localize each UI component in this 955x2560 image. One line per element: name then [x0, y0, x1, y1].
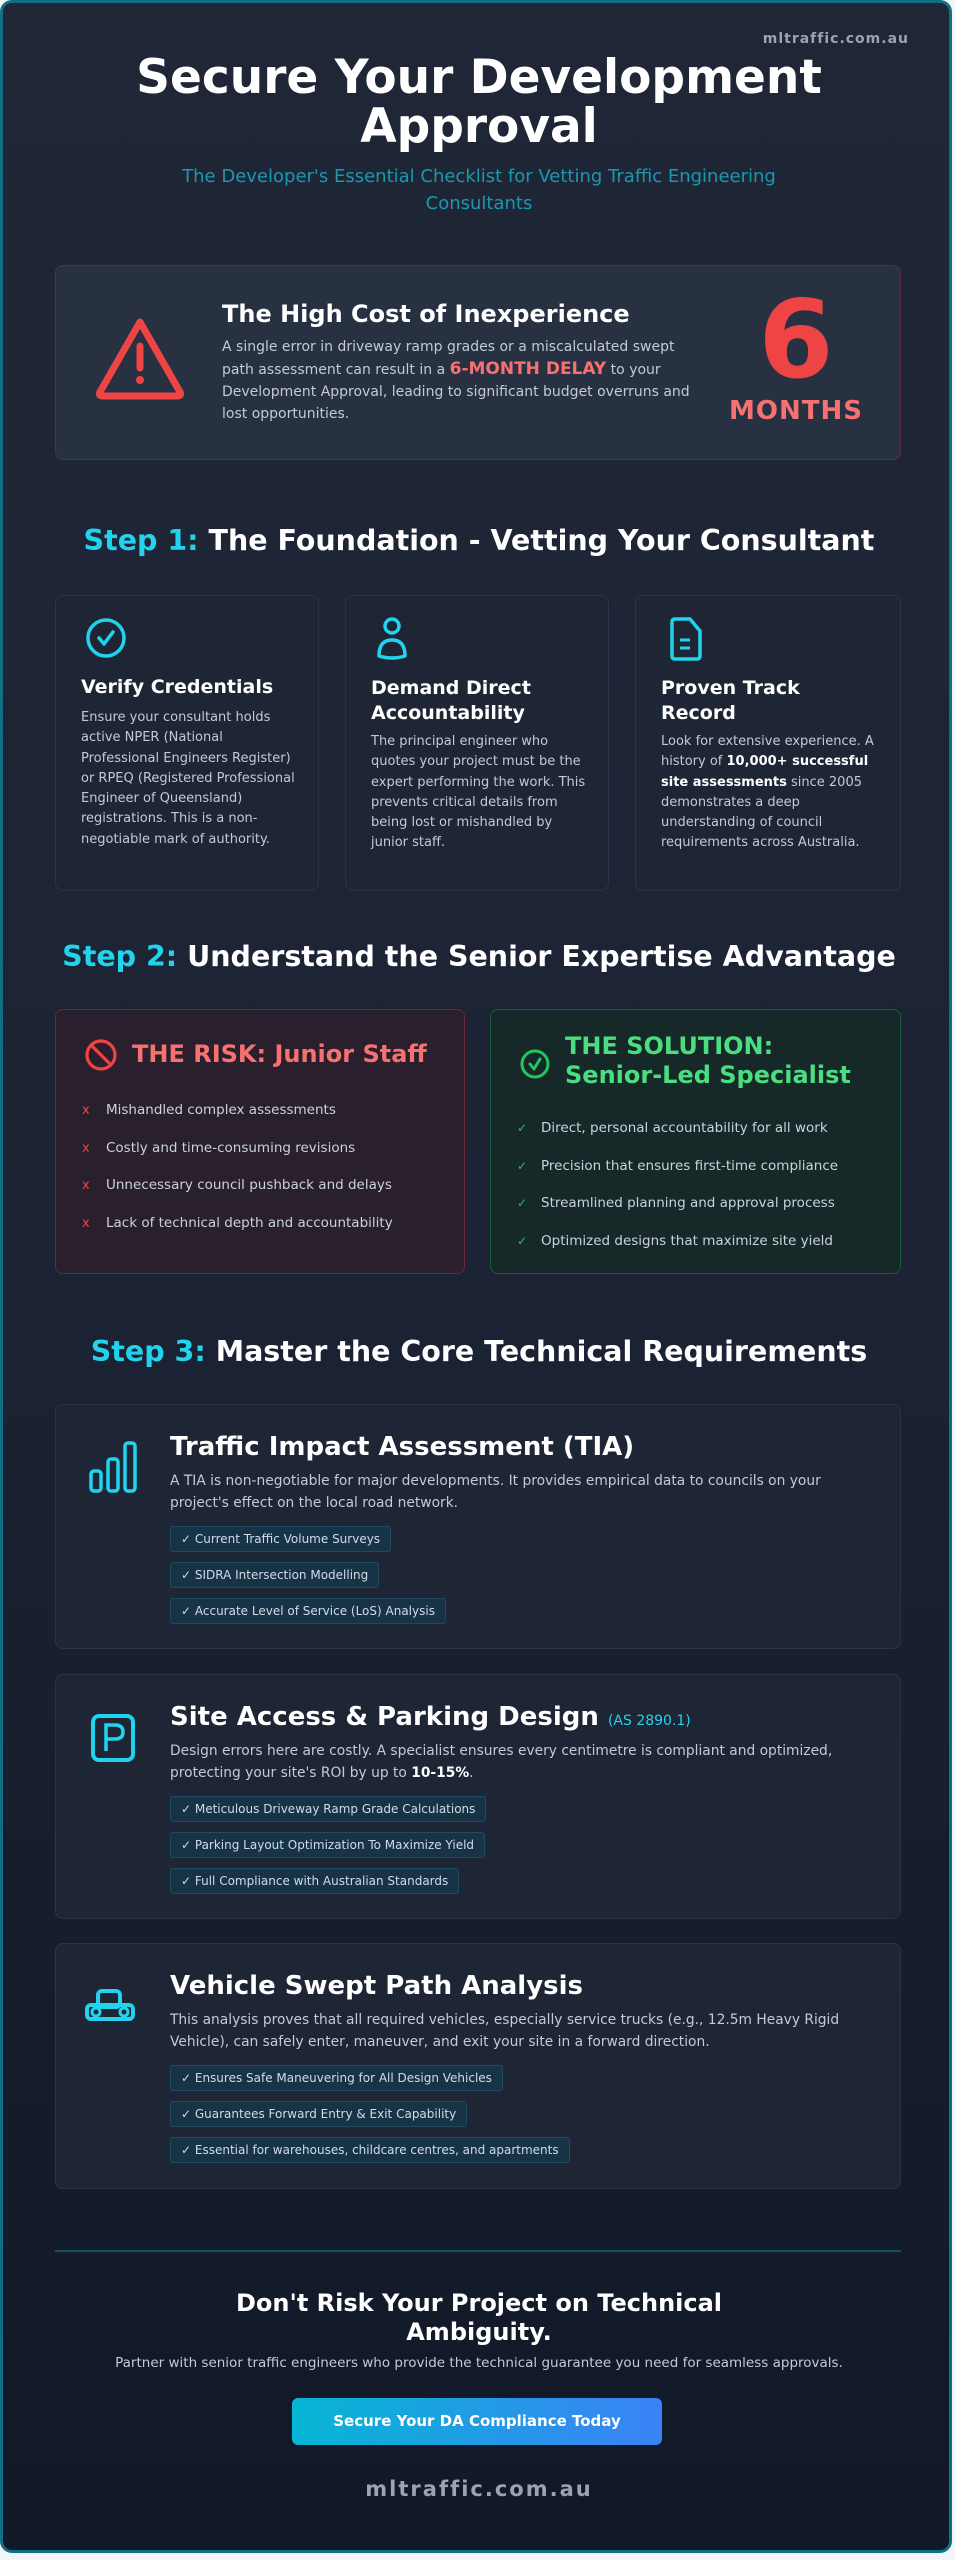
title [136, 50, 822, 154]
text: Ensure your consultant holds active NPER (National Professional Engineers Register) or RPEQ (Registered Professional Engineer of Queensland) registrations. This is a non-negotiable mark of authority. [81, 710, 295, 847]
title: Traffic Impact Assessment (TIA) [170, 1432, 634, 1462]
heading [565, 1032, 851, 1089]
list: Optimized designs that maximize site yield [541, 1232, 833, 1248]
icon: warning [96, 318, 184, 400]
tags: ✓ Guarantees Forward Entry & Exit Capability [181, 2107, 456, 2121]
tags [170, 1796, 486, 1894]
list: x [82, 1178, 90, 1193]
title: Site Access & Parking Design (AS 2890.1) [170, 1702, 691, 1732]
title: Secure Your Development [136, 50, 822, 105]
heading: THE RISK: Junior Staff [132, 1040, 427, 1068]
list: x [82, 1103, 90, 1118]
icon: document [670, 617, 702, 661]
panel: TIA [55, 1404, 901, 1649]
heading: step 2: Step 2: Understand the Senior Expertise Advantage [62, 940, 896, 973]
list: Precision that ensures first-time compliance [541, 1158, 838, 1174]
stat: 6 months [729, 278, 863, 426]
list: ✓ [517, 1196, 527, 1210]
text: This analysis proves that all required vehicles, especially service trucks (e.g., 12.5m Heavy Rigid Vehicle), can safely enter, maneuver, and exit your site in a forward direction. [170, 2012, 839, 2050]
panel: parking [55, 1674, 901, 1919]
tags: ✓ Meticulous Driveway Ramp Grade Calculations [181, 1802, 475, 1816]
panel: swept path [55, 1943, 901, 2189]
CTA button [292, 2398, 662, 2445]
tags: ✓ SIDRA Intersection Modelling [181, 1568, 368, 1582]
footer brand: mltraffic.com.au [365, 2477, 593, 2501]
text: A single error in driveway ramp grades or a miscalculated swept path assessment can result in a 6-MONTH DELAY to your Development Approval, leading to significant budget overruns and lost opportunities. [222, 339, 690, 422]
tags: ✓ Parking Layout Optimization To Maximize Yield [181, 1838, 474, 1852]
title: Demand Direct Accountability [371, 677, 531, 724]
list: x [82, 1140, 90, 1156]
list: Streamlined planning and approval process [541, 1195, 835, 1211]
subtitle: The Developer's Essential Checklist for Vetting Traffic Engineering Consultants [182, 166, 776, 214]
tags: ✓ Current Traffic Volume Surveys [181, 1532, 380, 1546]
text: Design errors here are costly. A specialist ensures every centimetre is compliant and optimized, protecting your site's ROI by up to 10-15%. [170, 1743, 832, 1781]
list: Costly and time-consuming revisions [106, 1140, 355, 1156]
stat: 6 months: MONTHS [729, 396, 863, 426]
CTA heading: Don't Risk Your Project on Technical Ambiguity. [236, 2289, 722, 2346]
text: The principal engineer who quotes your project must be the expert performing the work. This prevents critical details from being lost or mishandled by junior staff. [371, 734, 585, 850]
tags: ✓ Ensures Safe Maneuvering for All Design Vehicles [181, 2071, 492, 2085]
icon: bar chart [89, 1441, 137, 1493]
stat: 6 months: 6 [758, 278, 834, 403]
list: Mishandled complex assessments [106, 1102, 336, 1118]
CTA text: Partner with senior traffic engineers who provide the technical guarantee you need for seamless approvals. [115, 2355, 843, 2371]
heading: step 1: Step 1: The Foundation - Vetting Your Consultant [84, 524, 874, 557]
title: Approval [360, 99, 598, 154]
tags: ✓ Full Compliance with Australian Standards [181, 1874, 448, 1888]
title: Vehicle Swept Path Analysis [170, 1971, 583, 2001]
heading: step 3: Step 3: Master the Core Technical Requirements [91, 1335, 867, 1368]
panel: risk [55, 1009, 465, 1274]
tags [170, 1526, 446, 1624]
list [82, 1102, 393, 1230]
list: ✓ [517, 1158, 527, 1172]
card: track record [635, 595, 901, 891]
card: verify credentials [55, 595, 319, 891]
heading: Senior-Led Specialist [565, 1061, 851, 1089]
list: Direct, personal accountability for all work [541, 1120, 828, 1136]
tags: ✓ Essential for warehouses, childcare centres, and apartments [181, 2143, 559, 2157]
list: ✓ [517, 1234, 527, 1248]
tags [170, 2065, 570, 2163]
icon: person [377, 617, 407, 660]
icon: parking P [91, 1714, 135, 1762]
icon: vehicle [85, 1989, 135, 2021]
brand top: mltraffic.com.au [763, 31, 909, 47]
icon: no sign [85, 1039, 117, 1071]
title: Verify Credentials [81, 676, 273, 698]
title: Proven Track Record [661, 677, 800, 724]
icon: check circle [86, 618, 126, 658]
tags: ✓ Accurate Level of Service (LoS) Analysis [181, 1604, 435, 1618]
list: Unnecessary council pushback and delays [106, 1177, 392, 1193]
heading: The High Cost of Inexperience [222, 300, 630, 328]
list [517, 1120, 838, 1248]
panel: solution [490, 1009, 901, 1274]
list: x [82, 1216, 90, 1230]
card: direct accountability [345, 595, 609, 891]
icon: check circle [520, 1050, 550, 1078]
list: Lack of technical depth and accountability [106, 1214, 393, 1230]
text: Look for extensive experience. A history of 10,000+ successful site assessments since 2005 demonstrates a deep understanding of council requirements across Australia. [661, 734, 874, 850]
list: ✓ [517, 1121, 527, 1135]
heading: THE SOLUTION: [565, 1032, 773, 1060]
text: A TIA is non-negotiable for major developments. It provides empirical data to councils on your project's effect on the local road network. [170, 1473, 821, 1511]
alert panel: high cost [55, 265, 901, 460]
CTA button: Secure Your DA Compliance Today [333, 2412, 621, 2430]
